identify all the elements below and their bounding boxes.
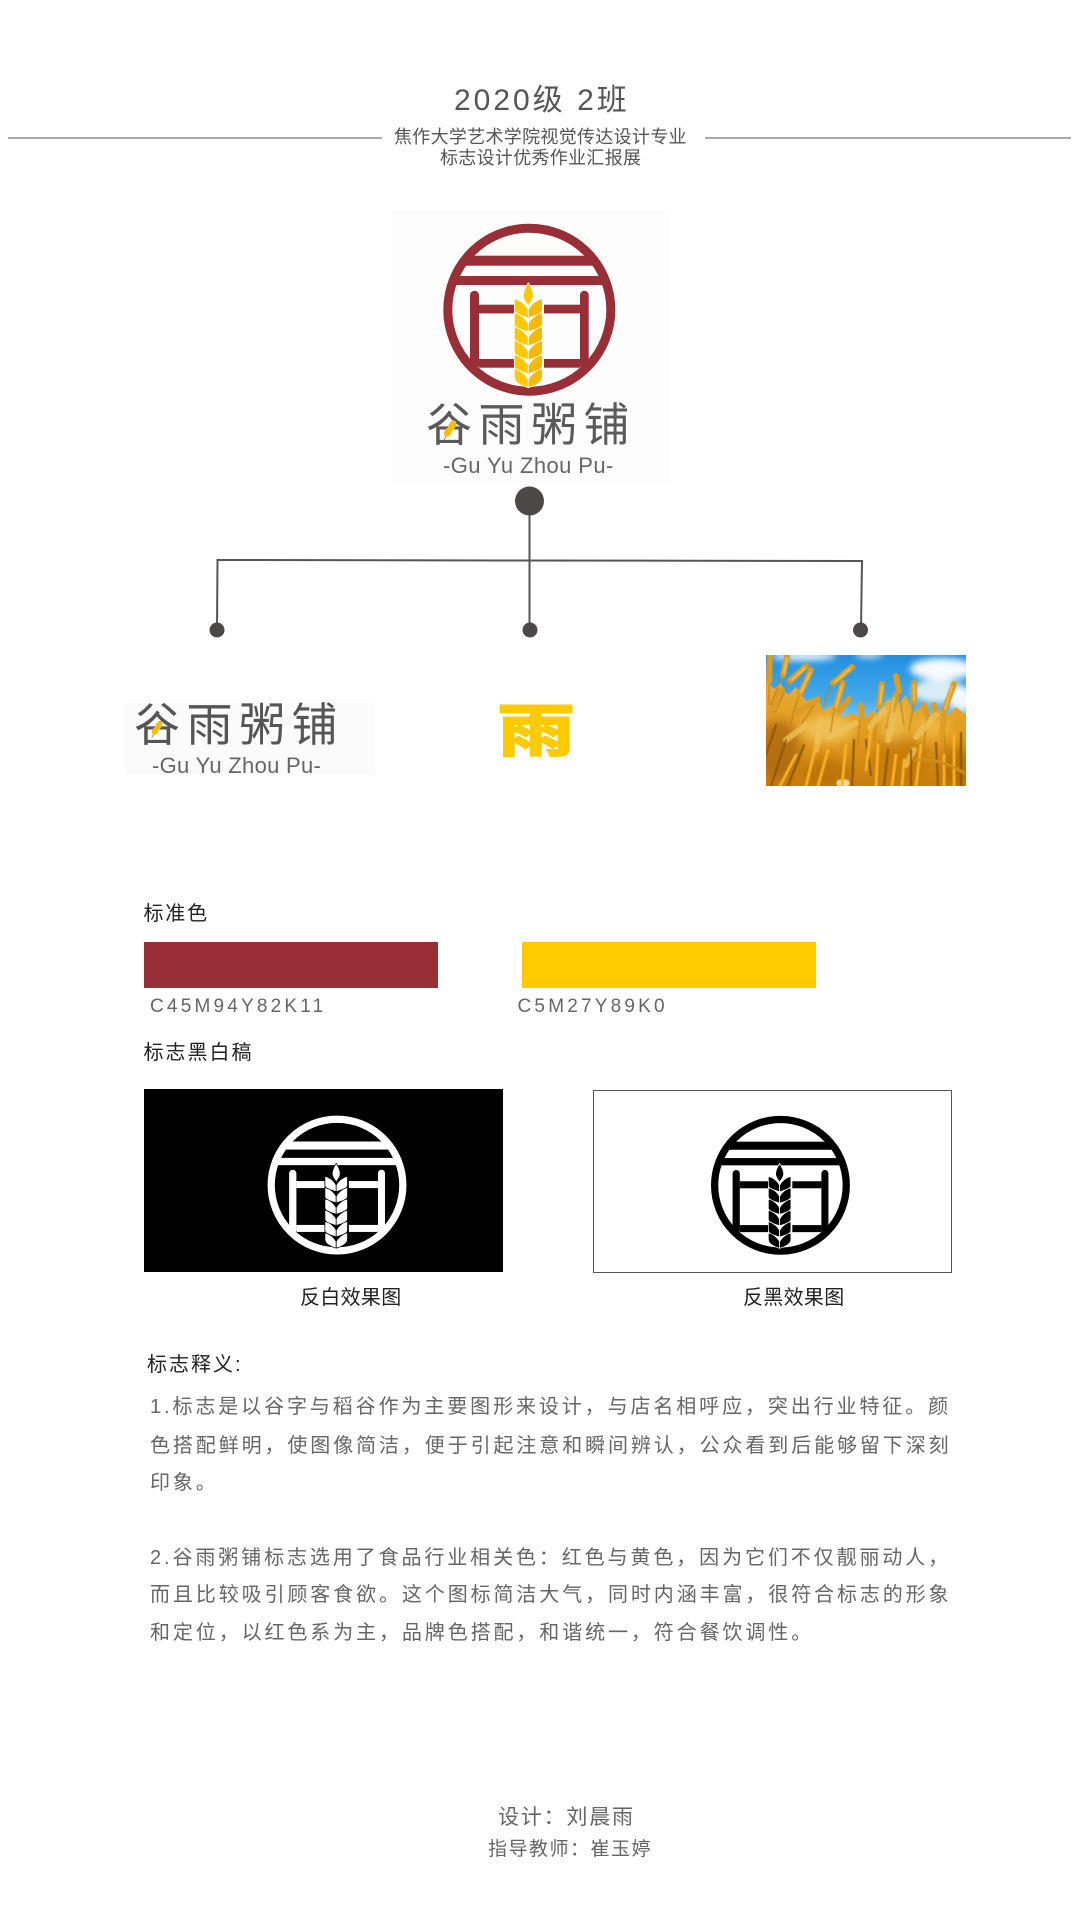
heading: logo meaning: 标志释义:: [147, 1354, 243, 1376]
wordmark pinyin: -Gu Yu Zhou Pu-: [152, 753, 321, 778]
black logo mark: [711, 1116, 850, 1255]
red color code: C45M94Y82K11: [150, 996, 326, 1017]
designer credit: 设计：刘晨雨: [498, 1806, 635, 1829]
teacher credit: 指导教师：崔玉婷: [488, 1839, 652, 1860]
logo wordmark: 谷雨粥铺: [426, 399, 636, 451]
paragraph 1: [150, 1396, 952, 1494]
header rule right: [705, 137, 1071, 138]
paragraph 2: 而且比较吸引顾客食欲。这个图标简洁大气，同时内涵丰富，很符合标志的形象: [150, 1584, 952, 1606]
panel: black on white: [592, 1090, 952, 1273]
panel: reversed white on black: [144, 1089, 503, 1272]
panel: primary logo: [392, 210, 669, 483]
connector tree with dots: [210, 486, 868, 638]
yellow character glyph: 雨: [497, 700, 575, 764]
caption: reversed white: 反白效果图: [300, 1287, 402, 1309]
swatch: yellow: [522, 942, 816, 988]
wordmark text: 谷雨粥铺: [134, 699, 344, 751]
yellow color code: C5M27Y89K0: [518, 996, 668, 1017]
paragraph 1: 1.标志是以谷字与稻谷作为主要图形来设计，与店名相呼应，突出行业特征。颜: [150, 1396, 951, 1418]
title: 2020级 2班: [454, 84, 630, 117]
logo pinyin: -Gu Yu Zhou Pu-: [443, 453, 614, 478]
subtitle line 1: 焦作大学艺术学院视觉传达设计专业: [394, 127, 687, 147]
logo mark: red ring with gate and wheat: [443, 224, 616, 396]
header rule left: [8, 137, 382, 138]
subtitle line 2: 标志设计优秀作业汇报展: [440, 148, 641, 168]
wordmark wheat accent: [444, 420, 456, 440]
paragraph 2: 和定位，以红色系为主，品牌色搭配，和谐统一，符合餐饮调性。: [150, 1622, 814, 1644]
paragraph 1: 印象。: [150, 1472, 219, 1494]
caption: reversed black: 反黑效果图: [743, 1287, 844, 1309]
paragraph 2: 2.谷雨粥铺标志选用了食品行业相关色：红色与黄色，因为它们不仅靓丽动人，: [150, 1547, 951, 1569]
paragraph 2: [150, 1546, 952, 1644]
swatch: red: [144, 942, 438, 988]
wheat field photo: [766, 655, 966, 786]
paragraph 1: 色搭配鲜明，使图像简洁，便于引起注意和瞬间辨认，公众看到后能够留下深刻: [150, 1435, 952, 1457]
heading: standard colors: 标准色: [144, 903, 209, 925]
heading: black and white draft: 标志黑白稿: [144, 1042, 254, 1064]
panel: wordmark: [125, 703, 374, 775]
white logo mark: [268, 1116, 406, 1254]
wordmark wheat accent: [152, 720, 162, 738]
